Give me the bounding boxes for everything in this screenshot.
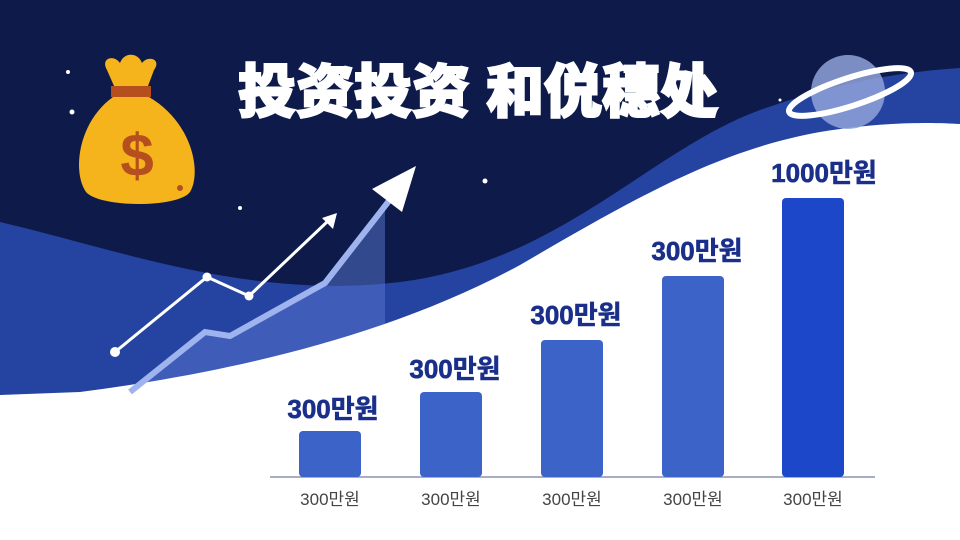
- bar chart: [270, 158, 877, 509]
- title: 投资投资 和侻穗处: [238, 60, 718, 125]
- bar 5: 1000만원: [771, 158, 877, 188]
- icon: money bag: [79, 55, 195, 204]
- bar 3: 300만원: [542, 490, 602, 509]
- arrow: light blue growth arrow: [130, 166, 416, 392]
- bar 3: 300만원: [530, 300, 622, 330]
- bar 4: 300만원: [651, 236, 743, 266]
- bar 1: [287, 394, 379, 509]
- bar 5: 300만원: [783, 490, 843, 509]
- bar 1: 300만원: [287, 394, 379, 424]
- icon: money bag: $: [120, 122, 154, 189]
- bar 1: 300만원: [300, 490, 360, 509]
- bar 3: [530, 300, 622, 509]
- arrow: white line chart: [110, 213, 337, 357]
- bar 4: [651, 236, 743, 509]
- bar 2: [409, 354, 501, 509]
- white wave area: [0, 123, 960, 540]
- bar 2: 300만원: [409, 354, 501, 384]
- bar 4: 300만원: [663, 490, 723, 509]
- bar 2: 300만원: [421, 490, 481, 509]
- bar 5: [771, 158, 877, 509]
- stars: [66, 70, 782, 210]
- arrow fill: translucent area under growth arrow: [130, 205, 385, 392]
- icon: planet: [785, 55, 915, 129]
